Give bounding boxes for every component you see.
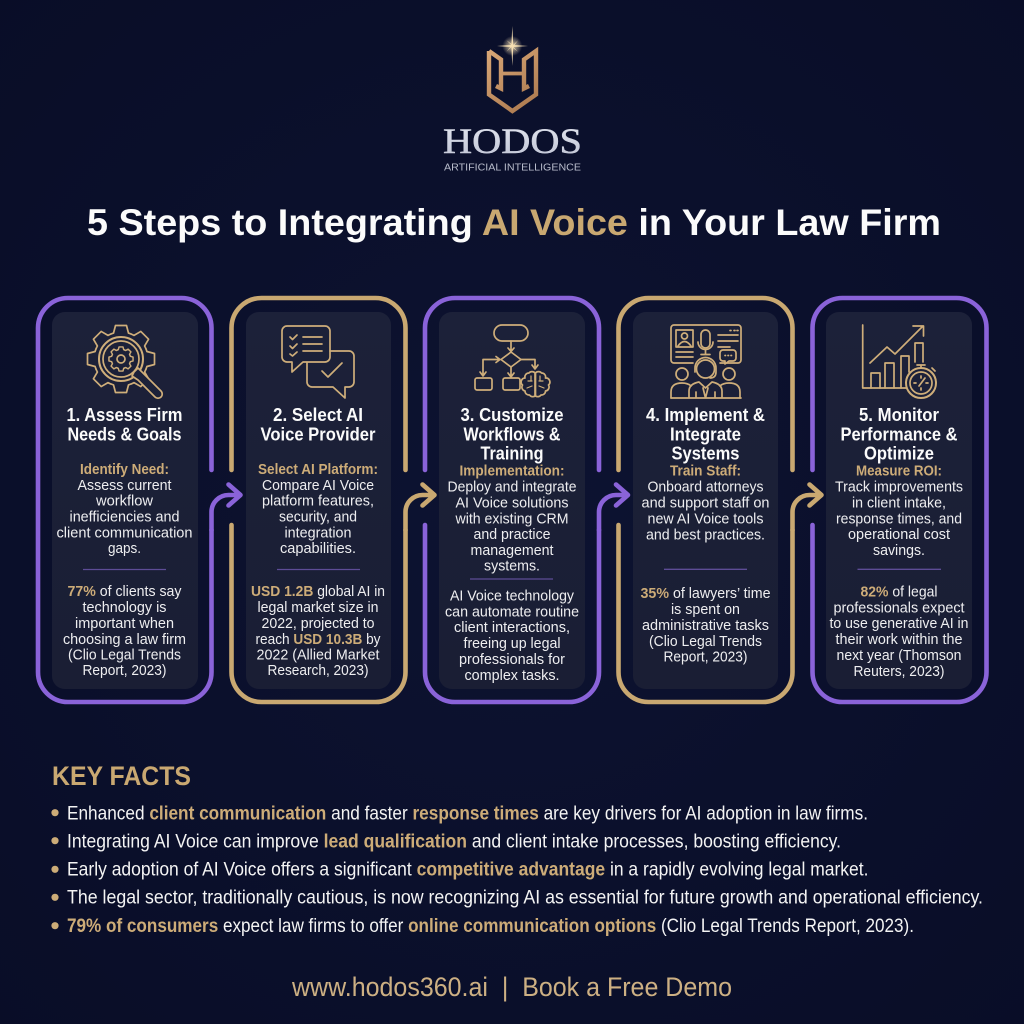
icon: screen and team with headset xyxy=(671,325,741,398)
key facts heading: KEY FACTS xyxy=(52,761,191,791)
logo wordmark: HODOS xyxy=(443,121,582,161)
panel: step 4 xyxy=(618,298,822,702)
text: step 3 description: with existing CRM xyxy=(455,510,568,527)
text: step 2 description: Select AI Platform: xyxy=(258,461,378,478)
bullet markers xyxy=(51,809,59,929)
text: step 1 statistic: choosing a law firm xyxy=(63,631,186,648)
text: step 1 description: Identify Need: xyxy=(80,461,169,478)
text: step 3 statistic: complex tasks. xyxy=(464,667,560,684)
frame: step 1 xyxy=(38,298,212,702)
text: step 4 statistic xyxy=(640,585,770,666)
heading: step 5: Optimize xyxy=(864,443,934,464)
icon: chat bubbles xyxy=(282,326,354,398)
heading: step 5: 5. Monitor xyxy=(859,404,939,425)
text: step 2 statistic: USD 1.2B global AI in xyxy=(251,583,385,600)
text: step 1 description: client communication xyxy=(56,524,192,542)
text: step 4 statistic: Report, 2023) xyxy=(664,649,748,666)
heading: step 3 xyxy=(460,404,564,464)
icon: star xyxy=(497,26,528,66)
panel: step 5 xyxy=(812,298,986,702)
text: step 5 description: response times, and xyxy=(836,510,962,527)
heading: step 5: Performance & xyxy=(840,423,958,444)
arrow: step 1 to 2 xyxy=(212,484,240,530)
frame: step 4 xyxy=(618,298,792,702)
heading: step 4: Integrate xyxy=(670,423,741,444)
text: step 3 description: and practice xyxy=(474,526,550,543)
text: step 5 description: savings. xyxy=(873,542,925,559)
text: step 2 statistic: legal market size in xyxy=(258,599,378,616)
text: step 4 statistic: 35% of lawyers’ time xyxy=(640,585,770,602)
text: step 3 statistic: professionals for xyxy=(459,651,565,668)
text: step 2 description xyxy=(258,461,378,557)
text: step 4 statistic: (Clio Legal Trends xyxy=(649,633,762,650)
text: step 2 statistic xyxy=(251,583,385,679)
text: step 3 description: Deploy and integrate xyxy=(448,479,576,496)
heading: step 5 xyxy=(840,404,958,464)
text: step 3 description: Implementation: xyxy=(460,463,564,480)
key fact list xyxy=(67,802,983,937)
card: step 3 xyxy=(439,312,585,689)
text: step 5 statistic: professionals expect xyxy=(834,600,965,616)
text: step 2 statistic: 2022 (Allied Market xyxy=(256,646,380,664)
card: step 1 xyxy=(52,312,198,689)
text: step 3 statistic xyxy=(445,588,579,684)
key fact list: Enhanced client communication and faster response times are key drivers for AI adoption in law firms. xyxy=(67,802,868,824)
text: step 4 statistic: is spent on xyxy=(671,601,740,618)
text: step 5 statistic: Reuters, 2023) xyxy=(854,663,944,680)
text: step 4 description: and best practices. xyxy=(646,526,765,543)
heading: step 3: 3. Customize xyxy=(460,404,564,425)
text: step 1 description: Assess current xyxy=(78,477,172,494)
text: step 3 statistic: AI Voice technology xyxy=(450,588,574,605)
title: 5 Steps to Integrating AI Voice in Your Law Firm xyxy=(87,201,941,243)
panel: step 1 xyxy=(38,298,240,702)
text: step 1 statistic: Report, 2023) xyxy=(82,662,166,679)
text: step 4 description: and support staff on xyxy=(642,494,770,512)
text: step 4 description xyxy=(642,463,770,543)
frame: step 3 xyxy=(425,298,599,702)
text: step 2 description: security, and xyxy=(279,509,357,526)
heading: step 2 xyxy=(260,404,376,444)
footer call to action: www.hodos360.ai | Book a Free Demo xyxy=(291,972,732,1002)
logo subtitle: ARTIFICIAL INTELLIGENCE xyxy=(444,162,581,174)
frame: step 2 xyxy=(232,298,406,702)
text: step 1 description: gaps. xyxy=(108,540,141,557)
text: step 1 description xyxy=(56,461,192,557)
text: step 1 statistic: 77% of clients say xyxy=(68,583,182,600)
text: step 1 statistic: (Clio Legal Trends xyxy=(68,646,181,664)
heading: step 3: Workflows & xyxy=(464,423,560,444)
text: step 3 description xyxy=(448,463,576,575)
text: step 5 description: operational cost xyxy=(848,526,951,543)
text: step 4 description: new AI Voice tools xyxy=(648,510,764,527)
text: step 1 description: inefficiencies and xyxy=(70,509,180,526)
text: step 2 description: Compare AI Voice xyxy=(262,477,374,494)
arrow: step 2 to 3 xyxy=(406,484,434,530)
text: step 3 statistic: client interactions, xyxy=(454,619,570,636)
heading: step 1 xyxy=(66,404,182,444)
arrow: step 4 to 5 xyxy=(792,484,822,530)
text: step 5 description: in client intake, xyxy=(852,494,946,512)
text: step 2 description: integration xyxy=(284,524,352,542)
text: step 1 description: workflow xyxy=(95,493,153,510)
panel: step 3 xyxy=(425,298,628,702)
heading: step 4: 4. Implement & xyxy=(646,404,765,425)
icon: shield with H xyxy=(489,51,536,111)
text: step 3 statistic: freeing up legal xyxy=(464,635,560,652)
text: step 3 description: management xyxy=(470,542,554,559)
text: step 3 description: systems. xyxy=(484,558,540,575)
text: step 1 statistic: important when xyxy=(75,615,174,632)
icon: chart and stopwatch xyxy=(863,325,936,398)
text: step 2 statistic: Research, 2023) xyxy=(268,662,368,679)
arrow: step 3 to 4 xyxy=(599,484,628,530)
text: step 4 description: Train Staff: xyxy=(670,463,741,480)
text: step 4 statistic: administrative tasks xyxy=(642,617,769,634)
icon: gear and magnifier xyxy=(88,326,162,398)
text: step 3 statistic: can automate routine xyxy=(445,604,579,620)
logo: Hodos xyxy=(443,26,582,174)
text: step 5 statistic: next year (Thomson xyxy=(836,647,962,664)
text: step 1 statistic xyxy=(63,583,186,679)
heading: step 1: 1. Assess Firm xyxy=(66,404,182,425)
icon: flowchart and brain xyxy=(475,325,550,397)
text: step 2 statistic: reach USD 10.3B by xyxy=(256,631,381,648)
heading: step 2: Voice Provider xyxy=(260,423,376,444)
text: step 5 statistic: 82% of legal xyxy=(860,584,938,601)
card: step 4 xyxy=(633,312,778,689)
text: step 1 statistic: technology is xyxy=(82,599,167,616)
text: step 2 description: platform features, xyxy=(262,493,374,510)
panel: step 2 xyxy=(232,298,434,702)
text: step 5 description: Measure ROI: xyxy=(856,463,942,480)
text: step 2 description: capabilities. xyxy=(280,540,356,557)
text: step 4 description: Onboard attorneys xyxy=(648,479,764,496)
card: step 2 xyxy=(246,312,391,689)
key fact list: Early adoption of AI Voice offers a significant competitive advantage in a rapidly evolving legal market. xyxy=(67,858,868,880)
text: step 5 statistic xyxy=(830,584,968,680)
frame: step 5 xyxy=(812,298,986,702)
heading: step 4: Systems xyxy=(672,443,740,464)
text: step 2 statistic: 2022, projected to xyxy=(262,615,374,632)
text: step 3 description: AI Voice solutions xyxy=(456,494,569,512)
key fact list: Integrating AI Voice can improve lead qualification and client intake processes, boosting efficiency. xyxy=(67,830,841,852)
text: step 5 statistic: their work within the xyxy=(836,631,962,648)
heading: step 4 xyxy=(646,404,765,464)
key facts section xyxy=(51,761,983,937)
heading: step 3: Training xyxy=(480,443,544,464)
key fact list: 79% of consumers expect law firms to offer online communication options (Clio Legal Trends Report, 2023). xyxy=(67,915,914,937)
heading: step 1: Needs & Goals xyxy=(68,423,182,444)
heading: step 2: 2. Select AI xyxy=(273,404,363,425)
card: step 5 xyxy=(826,312,972,689)
text: step 5 statistic: to use generative AI in xyxy=(830,615,968,632)
text: step 5 description: Track improvements xyxy=(835,479,963,496)
text: step 5 description xyxy=(835,463,963,559)
